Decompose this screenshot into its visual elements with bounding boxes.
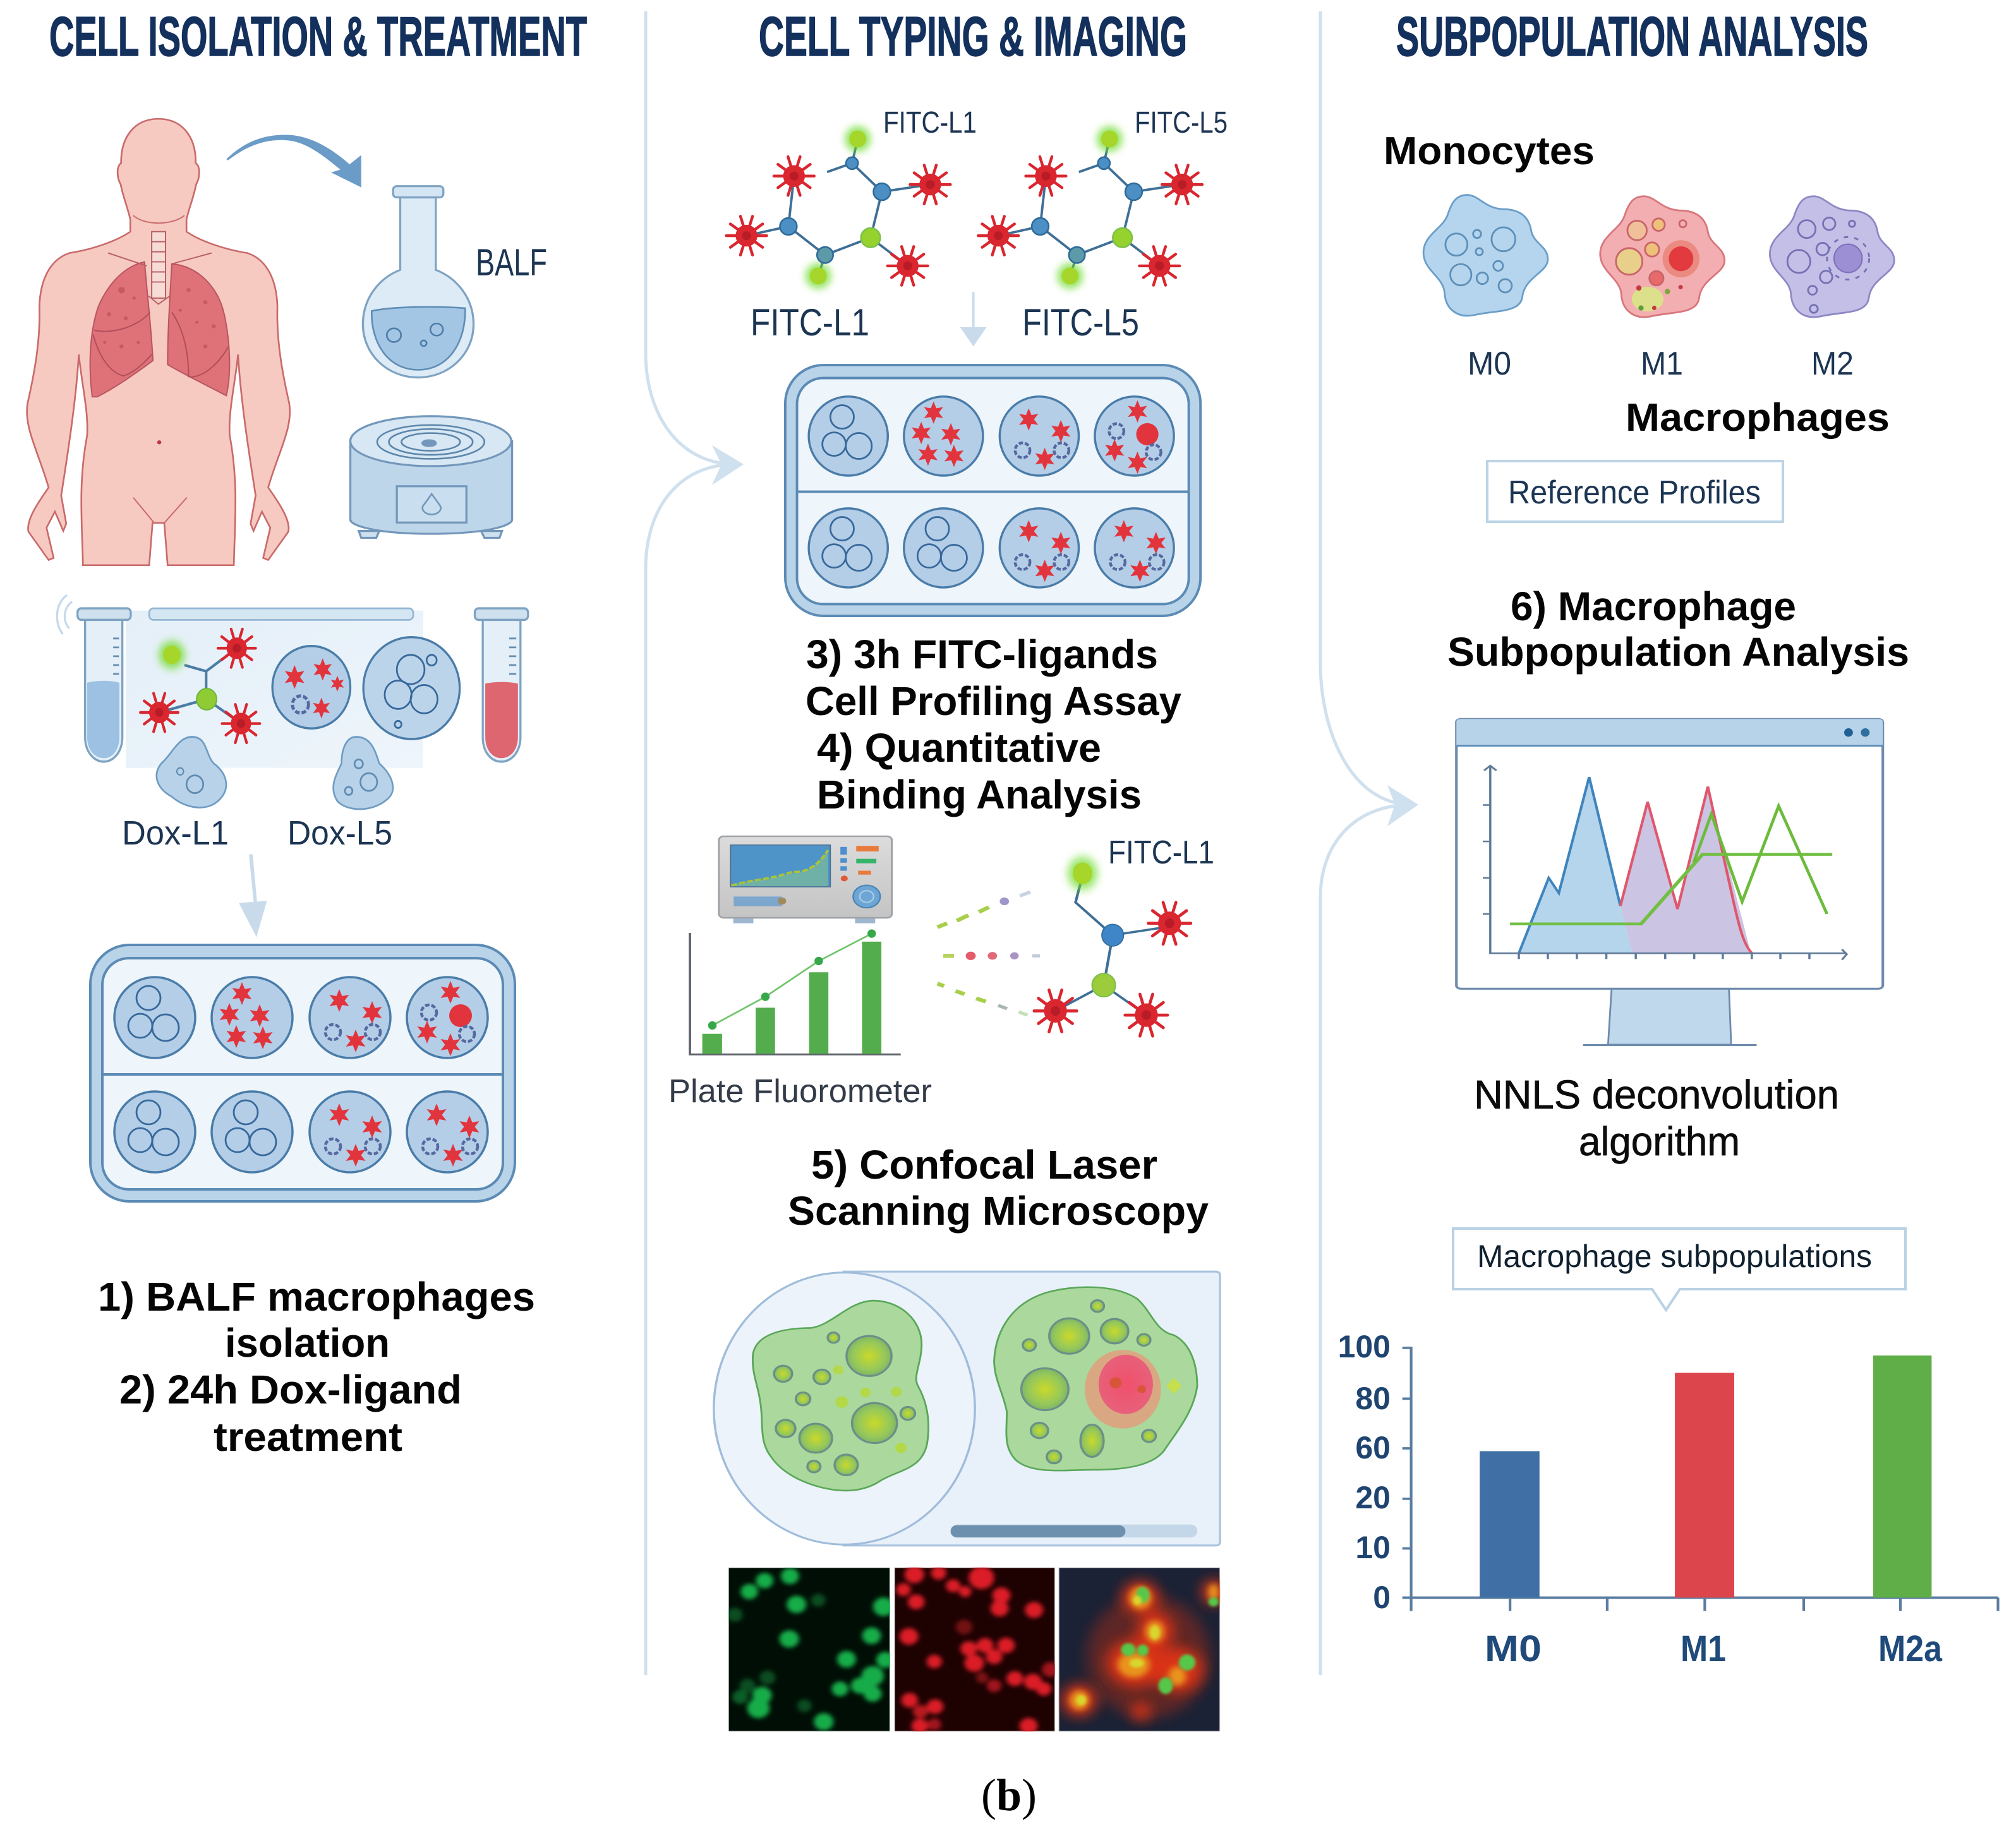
micrograph: green channel (727, 1568, 895, 1731)
heading: step 5 (788, 1142, 1209, 1234)
box: Reference Profiles (1487, 461, 1783, 522)
caption: steps 3 and 4: 3) 3h FITC-ligands (806, 632, 1158, 677)
panel: cell typing and imaging (668, 5, 1228, 1734)
bar chart: macrophage subpopulations: 60 (1355, 1430, 1391, 1465)
callout: Macrophage subpopulations: Macrophage subpopulations (1477, 1239, 1872, 1274)
label: BALF: BALF (476, 241, 547, 284)
chart: fluorometer bars with trend line (690, 929, 901, 1054)
well plate: Dox treatment (90, 945, 515, 1201)
label: M0: M0 (1468, 346, 1511, 382)
illustration: confocal cell panel (714, 1271, 1220, 1546)
icon: plate fluorometer instrument (719, 836, 892, 923)
callout: Macrophage subpopulations (1453, 1229, 1905, 1310)
bar chart: macrophage subpopulations: 80 (1355, 1381, 1391, 1416)
bar chart: macrophage subpopulations: 100 (1338, 1329, 1391, 1364)
label: Macrophages: Macrophages (1626, 396, 1890, 440)
bar chart: macrophage subpopulations: M1 (1681, 1628, 1726, 1669)
label: FITC-L5 upper: FITC-L5 (1135, 106, 1228, 140)
label: Dox-L5: Dox-L5 (287, 814, 392, 852)
caption: steps 1 and 2: isolation (225, 1320, 390, 1366)
figure label: (b): (b) (981, 1770, 1037, 1820)
label: FITC-L1 upper: FITC-L1 (883, 106, 977, 140)
panel: subpopulation analysis (1338, 5, 1998, 1669)
heading: step 6: 6) Macrophage (1511, 584, 1796, 629)
bar chart: macrophage subpopulations (1338, 1329, 1998, 1669)
cell: M0 macrophage (1423, 195, 1548, 316)
label: FITC-L5 lower: FITC-L5 (1022, 301, 1139, 344)
caption: steps 1 and 2: treatment (214, 1414, 402, 1460)
bar chart: macrophage subpopulations: 10 (1355, 1530, 1391, 1565)
cell: green macrophage with red nucleus (994, 1287, 1197, 1470)
bar chart: macrophage subpopulations: M2a (1878, 1628, 1943, 1669)
panel: cell isolation and treatment (27, 5, 587, 1460)
illustration: fluorescence signal dashes (938, 892, 1040, 1015)
icon: centrifuge (351, 416, 512, 538)
caption: steps 1 and 2 (98, 1274, 535, 1460)
label: Monocytes: Monocytes (1384, 129, 1595, 173)
label: FITC-L1 lower: FITC-L1 (751, 301, 869, 344)
caption: steps 3 and 4: Binding Analysis (817, 772, 1142, 817)
heading: cell isolation and treatment: CELL ISOLATION & TREATMENT (49, 5, 587, 68)
molecule: FITC-L1 (727, 126, 950, 289)
arrow: down to FITC plate (960, 292, 987, 347)
molecule: FITC-L1 binding (1034, 857, 1191, 1036)
divider arrow: column two to column three (1320, 11, 1418, 1675)
heading: step 5: Scanning Microscopy (788, 1188, 1209, 1234)
heading: step 5: 5) Confocal Laser (811, 1142, 1157, 1187)
heading: step 6: Subpopulation Analysis (1447, 629, 1909, 675)
label: Plate Fluorometer: Plate Fluorometer (668, 1073, 932, 1110)
caption: NNLS deconvolution algorithm: NNLS deconvolution (1474, 1072, 1839, 1117)
label: Dox-L1: Dox-L1 (122, 814, 229, 852)
divider arrow: column one to column two (646, 11, 744, 1675)
illustration: Dox-ligand treatment panel (57, 595, 528, 809)
icon: monitor with deconvolution chart (1456, 719, 1883, 1045)
cell: M2 macrophage (1770, 196, 1894, 317)
icon: BALF flask (363, 186, 474, 378)
heading: cell typing and imaging: CELL TYPING & IMAGING (759, 5, 1187, 68)
molecule: FITC-L5 (978, 126, 1202, 289)
label: M2: M2 (1811, 346, 1854, 382)
caption: steps 1 and 2: 2) 24h Dox-ligand (119, 1367, 462, 1412)
caption: NNLS deconvolution algorithm (1474, 1072, 1839, 1164)
bar chart: macrophage subpopulations: 20 (1355, 1480, 1391, 1515)
caption: NNLS deconvolution algorithm: algorithm (1579, 1119, 1740, 1164)
heading: step 6 (1447, 584, 1909, 675)
caption: steps 3 and 4 (806, 632, 1181, 817)
box: Reference Profiles: Reference Profiles (1508, 474, 1761, 511)
caption: steps 3 and 4: 4) Quantitative (817, 725, 1101, 771)
label: M1: M1 (1641, 346, 1683, 382)
label: FITC-L1 binding: FITC-L1 (1108, 834, 1214, 871)
chart: overlapping deconvolution peaks (1483, 766, 1847, 959)
icon: human body with lungs (27, 119, 290, 565)
bar chart: macrophage subpopulations: M0 (1485, 1628, 1542, 1669)
cell: green macrophage (752, 1301, 929, 1491)
cell: M1 macrophage (1600, 196, 1725, 317)
arrow: body to flask (226, 135, 361, 188)
bar chart: macrophage subpopulations: 0 (1373, 1580, 1391, 1615)
caption: steps 3 and 4: Cell Profiling Assay (806, 678, 1181, 724)
arrow: down to well plate (239, 854, 267, 937)
well plate: FITC ligands (785, 365, 1200, 616)
caption: steps 1 and 2: 1) BALF macrophages (98, 1274, 535, 1319)
micrograph: red channel (895, 1566, 1059, 1734)
micrograph: merged channels (1059, 1568, 1224, 1731)
